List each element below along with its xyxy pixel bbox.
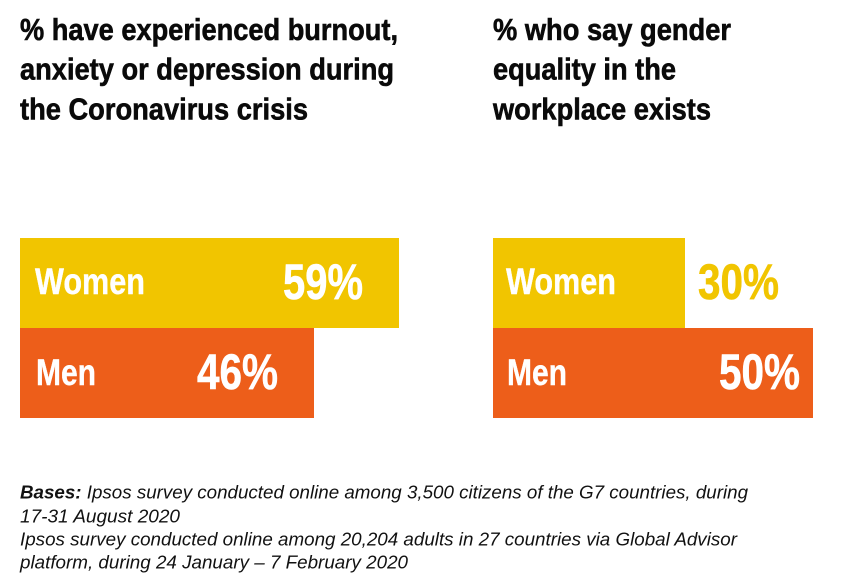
bar: women 59%: Women bbox=[35, 261, 145, 302]
heading: gender equality bbox=[492, 12, 731, 126]
footnote: bases: 17-31 August 2020 bbox=[20, 506, 181, 526]
footnote: bases bbox=[19, 482, 749, 572]
bar: men 46%: 46% bbox=[197, 344, 278, 400]
bar: women 59%: 59% bbox=[283, 254, 363, 310]
bar: men 50% bbox=[493, 328, 813, 418]
bar: women 30% bbox=[493, 238, 779, 328]
heading: gender equality: % who say gender bbox=[493, 12, 731, 47]
bar: men 50%: Men bbox=[507, 352, 567, 393]
heading: burnout: anxiety or depression during bbox=[20, 52, 394, 86]
bar: men 50%: 50% bbox=[719, 344, 800, 400]
footnote: bases: Ipsos survey conducted online among 20,204 adults in 27 countries via Global Advisor bbox=[20, 528, 738, 550]
footnote: bases: Bases: Ipsos survey conducted online among 3,500 citizens of the G7 countries, during bbox=[20, 482, 749, 502]
heading: gender equality: equality in the bbox=[493, 52, 676, 86]
bar: women 30%: Women bbox=[506, 261, 616, 302]
heading: burnout: the Coronavirus crisis bbox=[20, 92, 308, 126]
heading: gender equality: workplace exists bbox=[492, 92, 711, 126]
chart: burnout bars bbox=[20, 238, 399, 418]
heading: burnout bbox=[20, 12, 398, 126]
chart: gender equality bars bbox=[493, 238, 813, 418]
footnote: bases: platform, during 24 January – 7 February 2020 bbox=[19, 552, 409, 572]
bar: women 30%: 30% bbox=[698, 254, 779, 310]
heading: burnout: % have experienced burnout, bbox=[20, 12, 398, 47]
bar: women 59% bbox=[20, 238, 399, 328]
bar: men 46% bbox=[20, 328, 314, 418]
bar: men 46%: Men bbox=[36, 352, 96, 393]
